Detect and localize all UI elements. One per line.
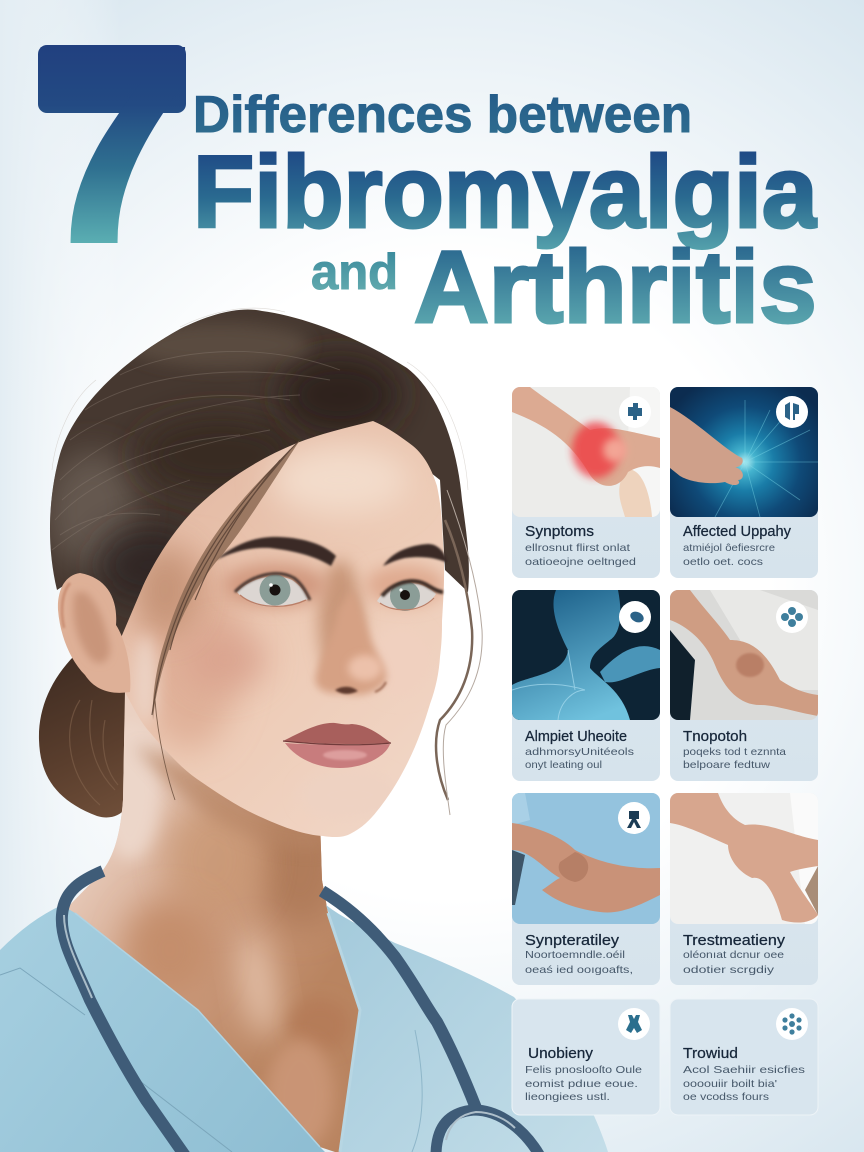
photo: wrist with red pain glow (512, 387, 660, 517)
caption: Synpteratiley (525, 933, 620, 949)
caption (683, 1046, 805, 1103)
caption: poqeks tod t eznnta (683, 746, 786, 758)
caption: Felis pnoslooſto Oule (525, 1064, 642, 1076)
caption: belpoare fedtuw (683, 759, 770, 771)
caption: odotier scrgdiy (683, 964, 775, 976)
stethoscope (62, 871, 540, 1152)
caption: adhmorsyUnitéeols (525, 746, 634, 758)
neck and chest (69, 692, 358, 1152)
caption (683, 933, 786, 976)
title (30, 0, 818, 344)
caption: eomist pdıue eoue. (525, 1078, 638, 1090)
caption: onyt leating oul (525, 759, 602, 771)
caption: atmiéjol ôefiesrcre (683, 542, 775, 554)
caption (683, 729, 786, 771)
photo: hand with blue energy burst (670, 387, 820, 517)
heading line: Differences between: Differences between (193, 86, 692, 144)
card: Symptoms (512, 387, 660, 578)
photo: x-ray torso (512, 590, 660, 720)
caption (525, 524, 636, 568)
caption: oetlo oet. cocs (683, 556, 763, 568)
caption: Trestmeatieny (683, 933, 786, 949)
icon (618, 802, 650, 834)
heading line: Fibromyalgia: Fibromyalgia (192, 134, 817, 248)
card: Unobieny (512, 999, 660, 1115)
caption: oooouiir boilt bia' (683, 1078, 777, 1090)
left side of scrubs (0, 905, 325, 1152)
icon (619, 396, 651, 428)
eyebrows (216, 537, 448, 566)
card: Synpteratiley (512, 793, 660, 985)
photo: hands over white shirt (670, 590, 818, 720)
caption: Almpiet Uheoite (525, 729, 627, 745)
caption: oléonıat dcnur oee (683, 949, 784, 961)
caption: Acol Saehiir esicfies (683, 1064, 805, 1076)
portrait: nurse (0, 300, 608, 1152)
caption: ellrosnut ﬂirst onlat (525, 542, 630, 554)
caption (683, 524, 792, 568)
lips (283, 723, 391, 768)
caption: oatioeojne oeltnged (525, 556, 636, 568)
caption: Synptoms (525, 524, 594, 540)
heading word: Arthritis: Arthritis (414, 230, 817, 344)
photo: hands on blue scrubs (512, 793, 660, 924)
ear (58, 573, 130, 693)
caption: Noortoemndle.oéil (525, 949, 625, 961)
icon (618, 1008, 650, 1040)
card: Almpiet Uheoite (512, 590, 660, 781)
hair bun (39, 655, 130, 817)
caption: oeaś ied ooıgoafts, (525, 964, 633, 976)
loose hair strands (152, 440, 482, 815)
photo: wrist held over white shirt (670, 793, 818, 924)
nose (315, 590, 386, 695)
caption (525, 933, 633, 976)
caption: Tnopotoh (683, 729, 747, 745)
heading word: and: and (310, 244, 398, 300)
caption (525, 729, 634, 771)
scrubs (0, 905, 608, 1152)
icon (776, 601, 808, 633)
caption: oe vcodss fours (683, 1091, 769, 1103)
card: Trowiud (670, 999, 818, 1115)
card: Tnopotoh (670, 590, 818, 781)
caption: Unobieny (528, 1046, 594, 1062)
icon (776, 1008, 808, 1040)
icon (619, 601, 651, 633)
caption: Affected Uppahy (683, 524, 792, 540)
card: Affected Uppahy (670, 387, 820, 578)
hair mass (50, 308, 469, 636)
caption (525, 1046, 642, 1103)
right shoulder of scrubs (326, 905, 608, 1152)
right eye (377, 581, 443, 611)
caption: Trowiud (683, 1046, 738, 1062)
caption: lieongiees ustl. (525, 1091, 610, 1103)
left eye (235, 574, 310, 607)
symptom cards grid (512, 387, 820, 1115)
card: Trestmeatieny (670, 793, 818, 985)
face (110, 410, 455, 840)
icon (776, 396, 808, 428)
